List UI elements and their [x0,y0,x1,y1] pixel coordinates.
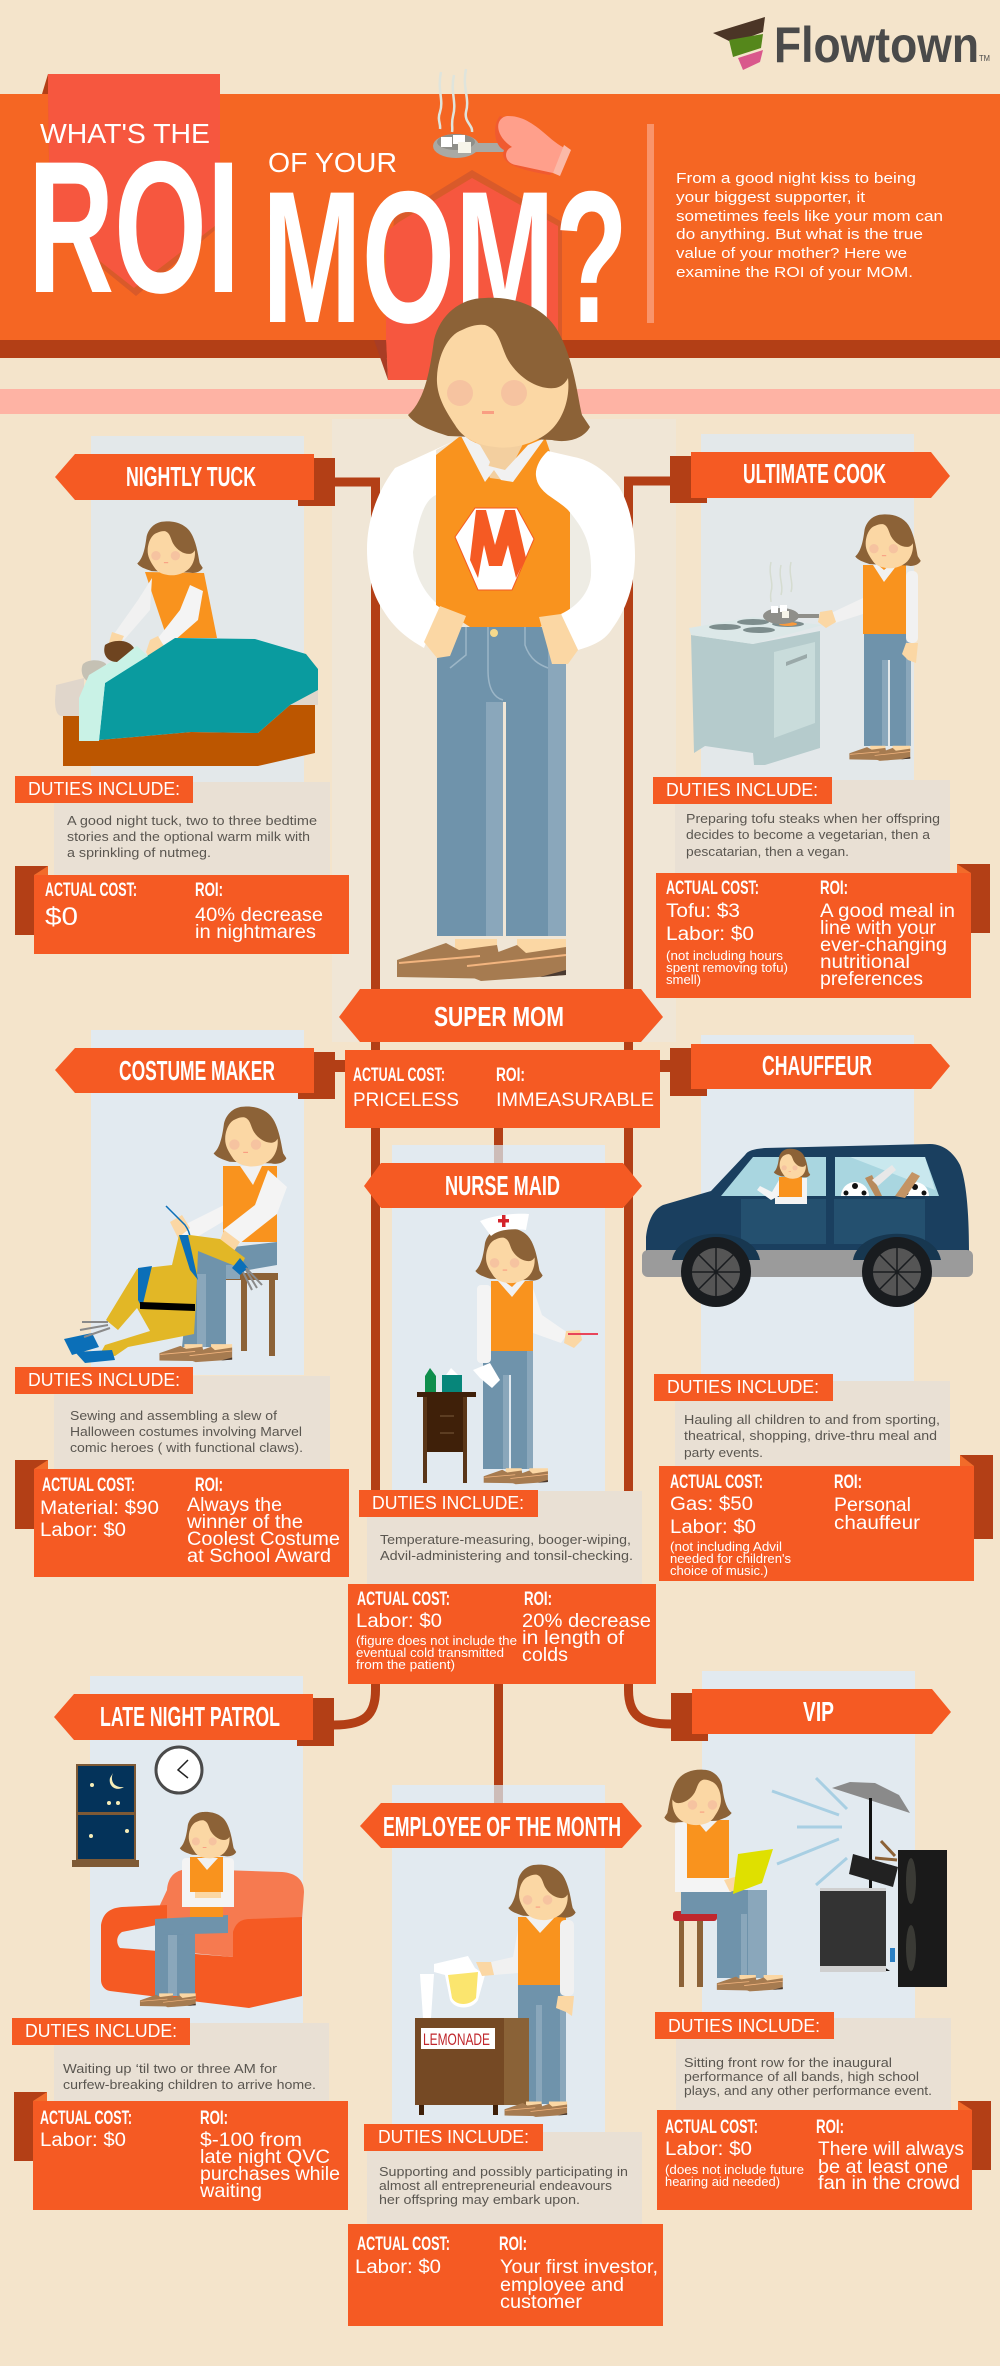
card background [90,1676,303,2023]
duties: ultimate cook: DUTIES INCLUDE: [666,780,818,800]
cost box: super mom: IMMEASURABLE [496,1090,654,1111]
amplifier [820,1888,886,1972]
cost box: vip: hearing aid needed) [665,2175,780,2189]
title: MOM?: MOM? [262,152,628,362]
duties: employee of the month: almost all entrepreneurial endeavours [379,2178,613,2193]
duties: chauffeur: theatrical, shopping, drive-thru meal and [684,1428,937,1443]
heading ribbon: chauffeur: CHAUFFEUR [762,1050,872,1081]
cost box: chauffeur: choice of music.) [670,1564,768,1578]
cost box: ultimate cook: (not including hours [666,949,783,963]
panel: costume maker [15,1030,349,1577]
shoes [397,939,566,981]
card background [702,1671,915,2018]
illustration: super mom [367,298,635,981]
cost box: chauffeur: needed for children's [670,1552,791,1566]
pink strip [0,389,1000,414]
duties: ultimate cook: Preparing tofu steaks when her offspring [686,811,940,826]
cost box: employee of the month [348,2224,663,2326]
duties: chauffeur [654,1374,950,1467]
cost box: late night patrol [14,2092,348,2210]
duties: vip: DUTIES INCLUDE: [668,2016,820,2036]
connector over card [494,1785,503,1803]
banner band [0,94,1000,340]
heading ribbon: employee of the month: EMPLOYEE OF THE MONTH [383,1811,621,1842]
intro paragraph: examine the ROI of your MOM. [676,264,913,281]
title: what's the: WHAT'S THE [40,118,210,149]
cost box: nightly tuck [15,866,349,954]
heading ribbon: late night patrol: LATE NIGHT PATROL [100,1701,280,1732]
cost box: vip: be at least one [818,2157,948,2178]
duties: employee of the month: Supporting and possibly participating in [379,2164,628,2179]
cost box: employee of the month: ROI: [499,2234,527,2255]
cost box: ultimate cook: ROI: [820,878,848,899]
cost box: late night patrol: waiting [199,2181,262,2202]
duties: nightly tuck: DUTIES INCLUDE: [28,779,180,799]
cost box: vip: Labor: $0 [665,2139,752,2160]
duties: nightly tuck: A good night tuck, two to three bedtime [67,813,317,828]
cost box: costume maker: Labor: $0 [40,1520,126,1541]
duties: chauffeur: Hauling all children to and from sporting, [684,1412,940,1427]
cost box: ultimate cook: preferences [820,969,923,990]
panel: late night patrol [12,1676,348,2210]
cost box: late night patrol: $-100 from [200,2130,302,2151]
duties: chauffeur: DUTIES INCLUDE: [667,1377,819,1397]
heading ribbon: vip: VIP [803,1696,834,1727]
cost box: nightly tuck: $0 [45,903,78,931]
cost box: late night patrol: Labor: $0 [40,2130,126,2151]
heading ribbon: costume maker [55,1048,335,1099]
cost box: chauffeur [659,1455,993,1581]
cost box: ultimate cook: spent removing tofu) [666,961,788,975]
right sleeve [536,451,635,650]
duties: vip [655,2012,951,2110]
panel: employee of the month [348,1785,663,2326]
cost box: vip: ACTUAL COST: [665,2117,758,2138]
spotlight rays [772,1778,847,1885]
trademark: TM [979,54,990,63]
vest [436,437,570,627]
illustration: car with mother driving [642,1144,973,1307]
cost box: costume maker: ACTUAL COST: [42,1475,135,1496]
red ribbon behind the banner [48,74,220,94]
cost box: costume maker [15,1460,349,1577]
cost box: nightly tuck: ROI: [195,880,223,901]
hands [424,606,466,658]
cost box: employee of the month: ACTUAL COST: [357,2234,450,2255]
cost box: nurse maid: from the patient) [356,1658,455,1672]
head [408,298,590,448]
cost box: ultimate cook: line with your [820,918,937,939]
cost box: employee of the month: Labor: $0 [355,2257,441,2278]
sofa [101,1869,304,2008]
collar [459,432,545,482]
heading ribbon: ultimate cook: ULTIMATE COOK [743,458,886,489]
cost box: ultimate cook: Labor: $0 [666,924,754,945]
panel: vip [655,1671,991,2210]
connector lines [334,481,671,1786]
cost box: super mom [345,1050,660,1128]
umbrella light [832,1782,910,1971]
heading ribbon: costume maker: COSTUME MAKER [119,1055,275,1086]
duties: employee of the month: DUTIES INCLUDE: [378,2127,529,2147]
cost box: nurse maid: (figure does not include the [356,1634,517,1648]
cost box: late night patrol: late night QVC [200,2147,330,2168]
panel: super mom [339,989,663,1128]
header: banner [0,69,1000,380]
duties: nightly tuck: a sprinkling of nutmeg. [67,845,211,860]
logo: Flowtown [713,17,990,73]
duties: late night patrol: DUTIES INCLUDE: [25,2021,177,2041]
cost box: super mom: PRICELESS [353,1090,459,1111]
heading ribbon: chauffeur [670,1044,950,1096]
duties: late night patrol: curfew-breaking children to arrive home. [63,2077,316,2092]
panel: chauffeur [642,1035,993,1581]
duties: costume maker: Halloween costumes involving Marvel [70,1424,302,1439]
illustration: mother cooking at a stove [689,514,921,765]
panel: light backdrop behind super mom [332,419,676,1042]
heading ribbon: super mom [339,989,663,1042]
duties: vip: plays, and any other performance event. [684,2083,932,2098]
cost box: nurse maid: eventual cold transmitted [356,1646,504,1660]
illustration: mother sewing a superhero costume [64,1107,287,1363]
cost box: employee of the month: Your first investor, [500,2257,658,2278]
panel: nightly tuck [15,436,349,954]
shield: left, behind ROI [48,94,220,296]
intro paragraph: sometimes feels like your mom can [676,208,943,225]
pitcher of lemonade [420,1956,494,2018]
cost box: chauffeur: ROI: [834,1472,862,1493]
duties: nurse maid: DUTIES INCLUDE: [372,1493,524,1513]
duties: employee of the month: her offspring may embark upon. [379,2192,580,2207]
duties: ultimate cook: pescatarian, then a vegan. [686,844,849,859]
card background [701,1035,914,1381]
duties: costume maker [15,1367,330,1469]
cost box: chauffeur: (not including Advil [670,1540,782,1554]
duties: ultimate cook: decides to become a vegetarian, then a [686,827,931,842]
cost box: vip: (does not include future [665,2163,804,2177]
cost box: nurse maid: ROI: [524,1589,552,1610]
heading ribbon: nurse maid: NURSE MAID [445,1170,560,1201]
ribbon fold [42,74,48,94]
duties: late night patrol [12,2018,329,2101]
cost box: costume maker: Always the [187,1495,282,1516]
lemonade stand [415,2018,529,2115]
shield lower drop [386,340,558,380]
cost box: costume maker: at School Award [187,1546,331,1567]
cost box: vip: fan in the crowd [818,2173,960,2194]
panel: nurse maid [348,1145,656,1684]
cost box: chauffeur: Labor: $0 [670,1517,756,1538]
icon: pan with tofu and oven mitt [433,69,571,176]
illustration: mother waiting up on sofa [72,1747,304,2008]
divider bar [647,124,654,323]
cost box: chauffeur: ACTUAL COST: [670,1472,763,1493]
cost box: vip: ROI: [816,2117,844,2138]
logo wordmark: Flowtown [774,17,979,73]
card background [392,1145,605,1492]
duties: ultimate cook [653,777,950,874]
duties: late night patrol: Waiting up ‘til two or three AM for [63,2061,278,2076]
duties: nightly tuck: stories and the optional warm milk with [67,829,310,844]
intro paragraph: From a good night kiss to being [676,170,916,187]
panel: ultimate cook [653,434,990,998]
cost box: ultimate cook: Tofu: $3 [666,901,740,922]
card background [701,434,914,780]
jeans [437,627,566,936]
cost box: super mom: ROI: [496,1065,525,1086]
cost box: nightly tuck: 40% decrease [195,905,323,926]
cost box: super mom: ACTUAL COST: [353,1065,445,1086]
duties: nurse maid: Temperature-measuring, booger-wiping, [380,1532,631,1547]
heading ribbon: vip [671,1689,951,1741]
title: of your: OF YOUR [268,147,397,178]
duties: employee of the month [364,2124,642,2224]
arms [367,440,456,648]
card background [392,1785,605,2132]
duties: nurse maid: Advil-administering and tonsil-checking. [380,1548,633,1563]
cost box: chauffeur: chauffeur [834,1513,921,1534]
heading ribbon: late night patrol [54,1694,334,1746]
cost box: nurse maid: 20% decrease [522,1611,651,1632]
intro paragraph [676,170,943,281]
illustration: mother at lemonade stand [415,1865,576,2117]
icon: clock [156,1747,202,1793]
banner shadow band [0,340,1000,358]
heading ribbon: super mom: SUPER MOM [434,1001,564,1032]
logo icon [713,17,765,70]
heading ribbon: ultimate cook [670,452,950,503]
intro paragraph: value of your mother? Here we [676,245,907,262]
duties: costume maker: DUTIES INCLUDE: [28,1370,180,1390]
heading ribbon: nurse maid [364,1163,642,1208]
illustration: nurse mother with thermometer [417,1214,598,1484]
heading ribbon: employee of the month [360,1803,642,1848]
M badge [455,508,534,590]
cost box: costume maker: ROI: [195,1475,223,1496]
cost box: nurse maid: ACTUAL COST: [357,1589,450,1610]
cost box: nightly tuck: ACTUAL COST: [45,880,137,901]
cost box: ultimate cook: ACTUAL COST: [666,878,759,899]
cost box: ultimate cook [656,864,990,998]
card background [91,436,304,782]
cost box: vip: There will always [818,2139,964,2160]
cost box: ultimate cook: A good meal in [820,901,955,922]
duties: costume maker: Sewing and assembling a slew of [70,1408,277,1423]
intro paragraph: do anything. But what is the true [676,226,923,243]
cost box: chauffeur: Gas: $50 [670,1494,753,1515]
title: ROI: ROI [28,122,240,332]
lemonade stand: LEMONADE [423,2030,490,2049]
cost box: ultimate cook: nutritional [820,952,910,973]
cost box: costume maker: Material: $90 [40,1498,159,1519]
heading ribbon: nightly tuck: NIGHTLY TUCK [126,461,256,492]
heading ribbon: nightly tuck [55,454,335,506]
cost box: late night patrol: ROI: [200,2108,228,2129]
cost box: costume maker: Coolest Costume [187,1529,340,1550]
cost box: employee of the month: employee and [500,2275,624,2296]
connector over card [494,1145,503,1163]
cost box: nurse maid: colds [522,1645,568,1666]
cost box: late night patrol: ACTUAL COST: [40,2108,132,2129]
cost box: nightly tuck: in nightmares [195,922,316,943]
cost box: ultimate cook: smell) [666,973,701,987]
cost box: nurse maid [348,1584,656,1684]
illustration: mother tucking child into bed [55,521,318,766]
duties: chauffeur: party events. [684,1445,763,1460]
duties: vip: performance of all bands, high school [684,2069,919,2084]
intro paragraph: your biggest supporter, it [676,189,866,206]
cost box: chauffeur: Personal [834,1495,911,1516]
duties: nurse maid [359,1490,642,1584]
illustration: mother in the front row at a concert [664,1770,947,1991]
duties: costume maker: comic heroes ( with functional claws). [70,1440,303,1455]
cost box: nurse maid: in length of [522,1628,625,1649]
cost box: late night patrol: purchases while [200,2164,340,2185]
cost box: vip [657,2101,991,2210]
icon: night window [72,1764,139,1867]
duties: vip: Sitting front row for the inaugural [684,2055,892,2070]
shield: centre, behind MOM [386,170,562,340]
duties: nightly tuck [15,776,330,876]
shield fold [374,340,388,380]
card background [91,1030,304,1375]
cost box: employee of the month: customer [500,2292,583,2313]
cost box: nurse maid: Labor: $0 [356,1611,442,1632]
cost box: ultimate cook: ever-changing [820,935,947,956]
speaker [898,1850,947,1987]
cost box: costume maker: winner of the [186,1512,303,1533]
